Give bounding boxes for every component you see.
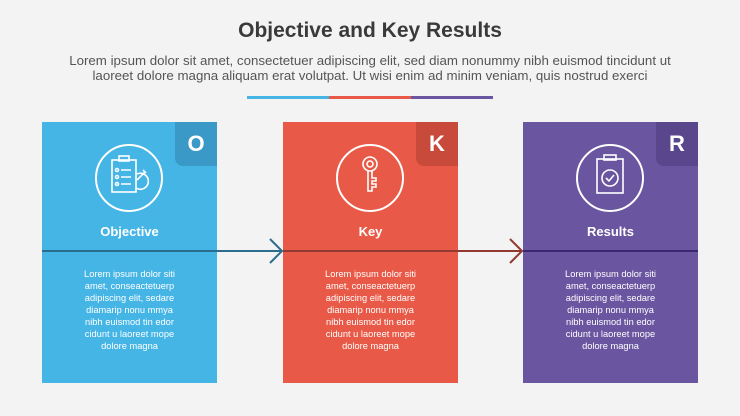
text: cidunt u laoreet mope bbox=[85, 329, 174, 339]
text: Lorem ipsum dolor siti bbox=[565, 269, 656, 279]
text: diamarip nonu mmya bbox=[327, 305, 414, 315]
panel: results bbox=[523, 122, 698, 383]
text: amet, conseactetuerp bbox=[566, 281, 655, 291]
tricolor underline bbox=[247, 96, 493, 99]
text: dolore magna bbox=[101, 341, 158, 351]
text bbox=[325, 269, 416, 351]
tag R bbox=[656, 122, 698, 166]
tag O: O bbox=[187, 131, 205, 156]
panel: key bbox=[283, 122, 458, 383]
text: dolore magna bbox=[582, 341, 639, 351]
text bbox=[565, 269, 656, 351]
panel: objective bbox=[42, 122, 217, 383]
text: adipiscing elit, sedare bbox=[566, 293, 655, 303]
icon: clipboard target bbox=[95, 144, 163, 212]
text: adipiscing elit, sedare bbox=[85, 293, 174, 303]
text: diamarip nonu mmya bbox=[86, 305, 173, 315]
arrow: key to results bbox=[283, 239, 522, 263]
text: amet, conseactetuerp bbox=[85, 281, 174, 291]
subtitle bbox=[69, 53, 671, 83]
text: adipiscing elit, sedare bbox=[326, 293, 415, 303]
label: Results bbox=[587, 224, 634, 239]
text: nibh euismod tin edor bbox=[326, 317, 415, 327]
subtitle: Lorem ipsum dolor sit amet, consectetuer adipiscing elit, sed diam nonummy nibh euismod tincidunt ut bbox=[69, 53, 671, 68]
text bbox=[84, 269, 175, 351]
icon: clipboard check bbox=[576, 144, 644, 212]
text: nibh euismod tin edor bbox=[85, 317, 174, 327]
text: amet, conseactetuerp bbox=[326, 281, 415, 291]
arrow: objective to key bbox=[42, 239, 282, 263]
label: Key bbox=[359, 224, 382, 239]
text: diamarip nonu mmya bbox=[567, 305, 654, 315]
text: Lorem ipsum dolor siti bbox=[325, 269, 416, 279]
subtitle: laoreet dolore magna aliquam erat volutpat. Ut wisi enim ad minim veniam, quis nostrud exerci bbox=[92, 68, 648, 83]
label: Objective bbox=[100, 224, 159, 239]
text: nibh euismod tin edor bbox=[566, 317, 655, 327]
tag O bbox=[175, 122, 217, 166]
tag R: R bbox=[669, 131, 685, 156]
tag K bbox=[416, 122, 458, 166]
icon: key bbox=[336, 144, 404, 212]
tag K: K bbox=[429, 131, 445, 156]
title: Objective and Key Results bbox=[238, 19, 502, 42]
text: cidunt u laoreet mope bbox=[566, 329, 655, 339]
text: dolore magna bbox=[342, 341, 399, 351]
text: Lorem ipsum dolor siti bbox=[84, 269, 175, 279]
text: cidunt u laoreet mope bbox=[326, 329, 415, 339]
results line bbox=[523, 250, 698, 252]
